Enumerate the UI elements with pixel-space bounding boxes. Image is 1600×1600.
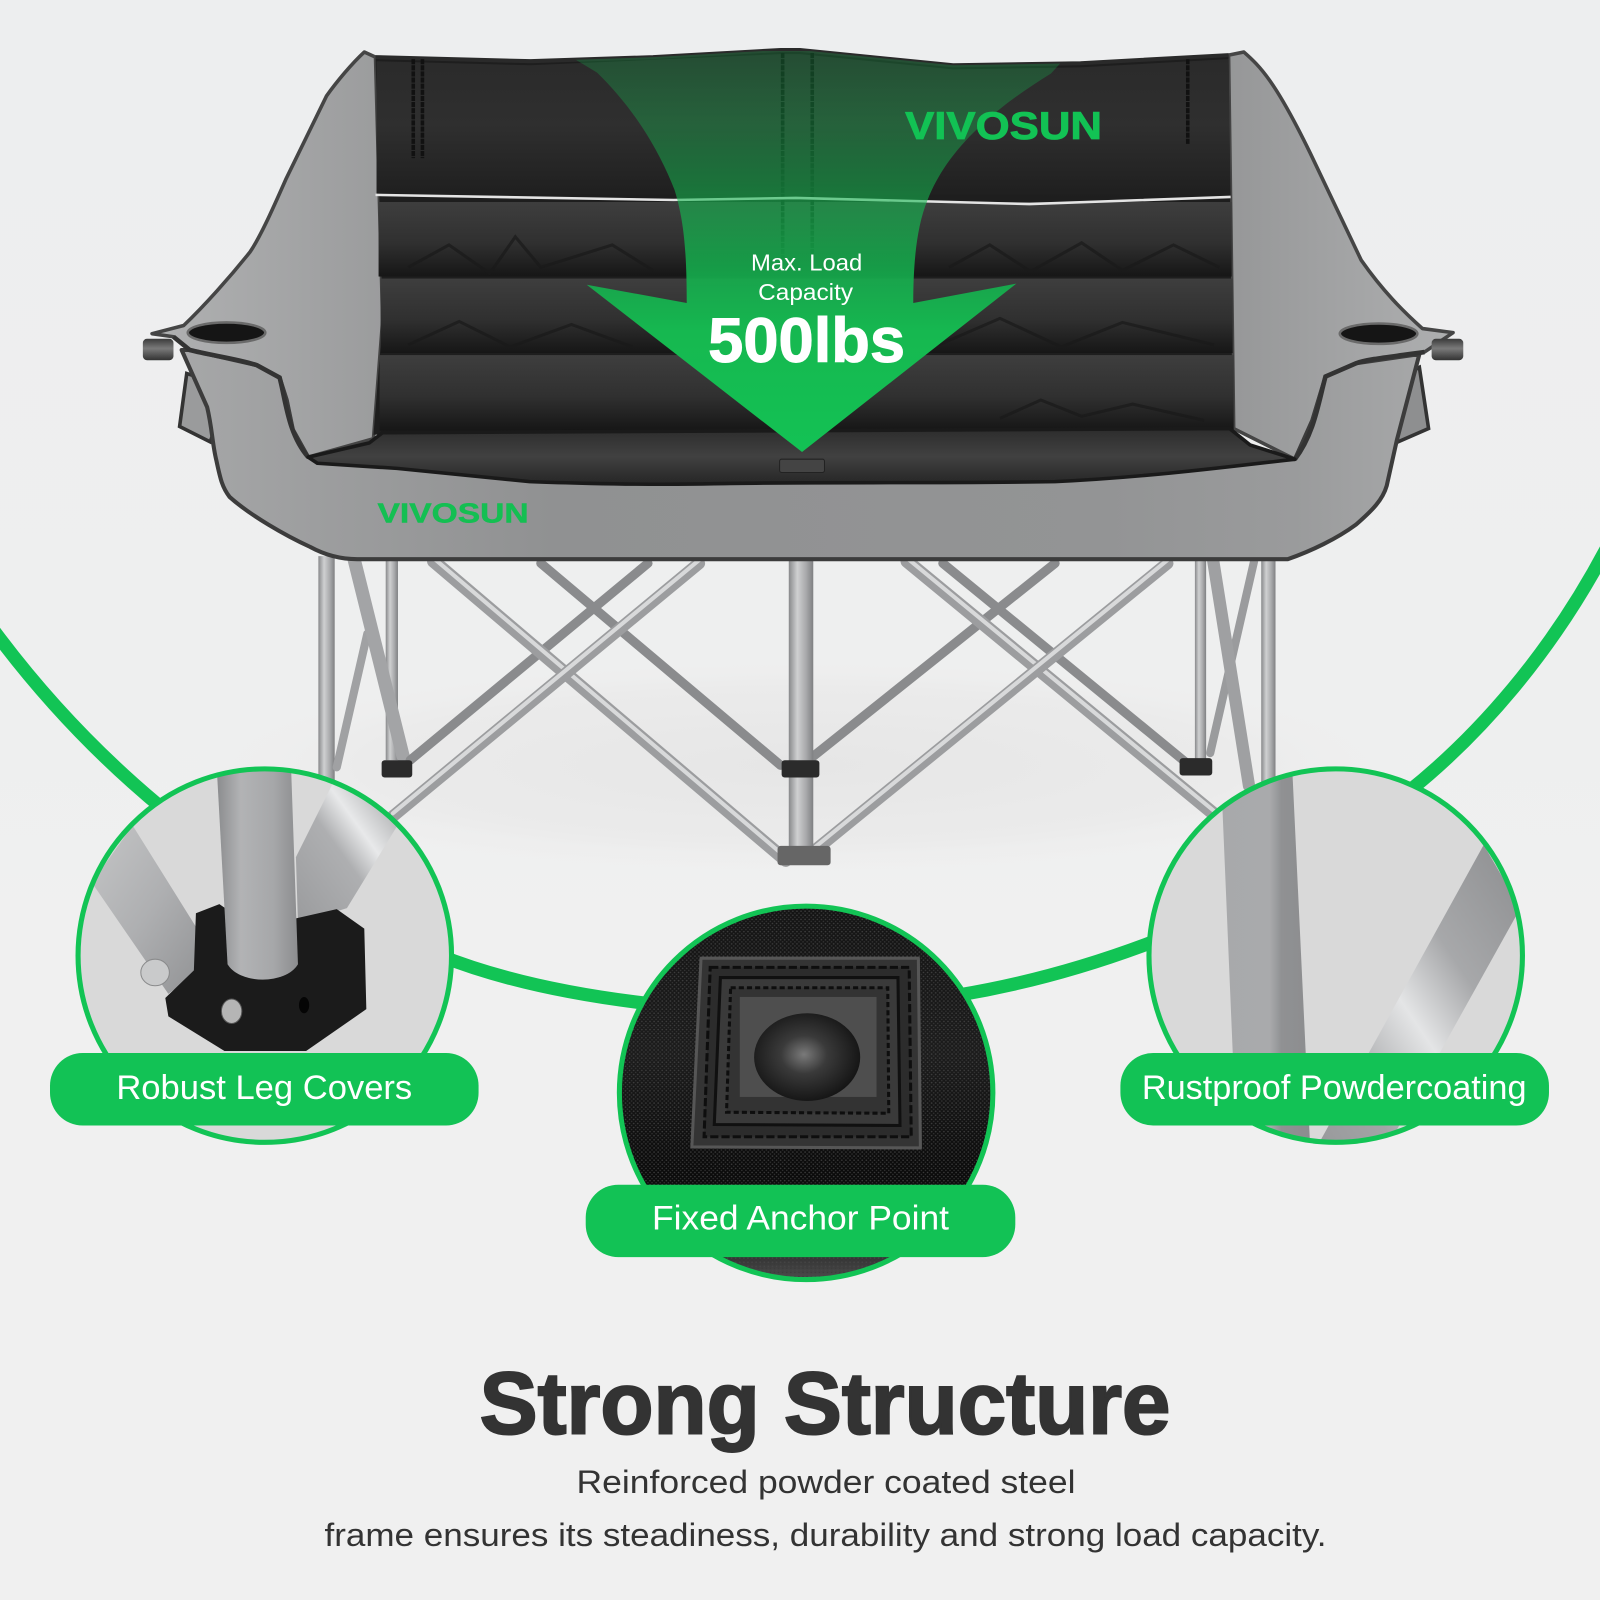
left arm flap (180, 373, 230, 442)
connector hole (299, 997, 309, 1013)
black seat cushion (308, 429, 1295, 484)
center leg (789, 556, 813, 855)
subtitle text (324, 1463, 1327, 1553)
detail circle: leg covers (78, 760, 452, 1142)
label pill: leg covers (50, 1053, 479, 1126)
seat anchor tab (780, 459, 824, 472)
chair seat body (143, 50, 1463, 559)
label pill: anchor point (586, 1185, 1015, 1257)
inner patch (740, 997, 877, 1097)
green connecting ring (0, 549, 1600, 1004)
rivet ball (754, 1013, 860, 1101)
right arm flap (1378, 367, 1429, 442)
black connector (165, 904, 366, 1051)
left knob (143, 339, 173, 360)
chair front panel (182, 350, 1419, 559)
right cup holder (1340, 323, 1417, 344)
load capacity label: 500lbs (708, 306, 905, 376)
label pill: leg covers: Robust Leg Covers (116, 1069, 412, 1107)
subtitle text: Reinforced powder coated steel (577, 1463, 1076, 1500)
label pill: powdercoating (1120, 1053, 1549, 1126)
leg foot caps (382, 758, 1212, 865)
vertical tube (216, 760, 298, 980)
rivet (141, 959, 169, 986)
load capacity label: Capacity (758, 279, 853, 305)
load arrow (561, 51, 1071, 452)
white stripe (376, 195, 1231, 204)
left diagonal tube (94, 826, 196, 994)
top piping (376, 50, 1229, 65)
load capacity label: Max. Load (751, 249, 862, 275)
right side legs (1195, 556, 1276, 791)
detail circle: powdercoating (1149, 760, 1522, 1148)
rear cross braces (410, 563, 1186, 765)
label pill: powdercoating: Rustproof Powdercoating (1142, 1069, 1527, 1107)
floor shadow (168, 653, 1434, 878)
stitched patch (692, 958, 920, 1148)
chair frame legs (318, 556, 1276, 860)
back quilted band middle (381, 279, 1233, 353)
detail circle: anchor point (612, 898, 1005, 1291)
logo on back: VIVOSUN (905, 105, 1102, 148)
logo on front: VIVOSUN (378, 497, 529, 528)
back quilted band upper (379, 202, 1232, 277)
vertical tube (1220, 760, 1310, 1148)
right wing (1229, 52, 1453, 459)
back stitched seams (413, 53, 1188, 265)
back cushion band top (377, 54, 1231, 196)
left arm seam (173, 337, 308, 457)
left side legs (318, 556, 403, 791)
title: Strong Structure (480, 1355, 1170, 1453)
diagonal tube (1316, 845, 1520, 1148)
left cup holder (188, 322, 265, 343)
left wing (152, 52, 383, 457)
label pill: anchor point: Fixed Anchor Point (652, 1200, 949, 1238)
right diagonal tube (296, 784, 396, 918)
quilt wrinkles (408, 237, 1219, 420)
front cross braces (393, 558, 1214, 860)
back quilted band lower (380, 355, 1234, 431)
right knob (1432, 339, 1463, 360)
load capacity label (708, 249, 905, 376)
subtitle text: frame ensures its steadiness, durability and strong load capacity. (324, 1516, 1327, 1553)
right arm seam (1295, 352, 1424, 459)
black quilted back (373, 50, 1233, 435)
screw (221, 999, 242, 1023)
